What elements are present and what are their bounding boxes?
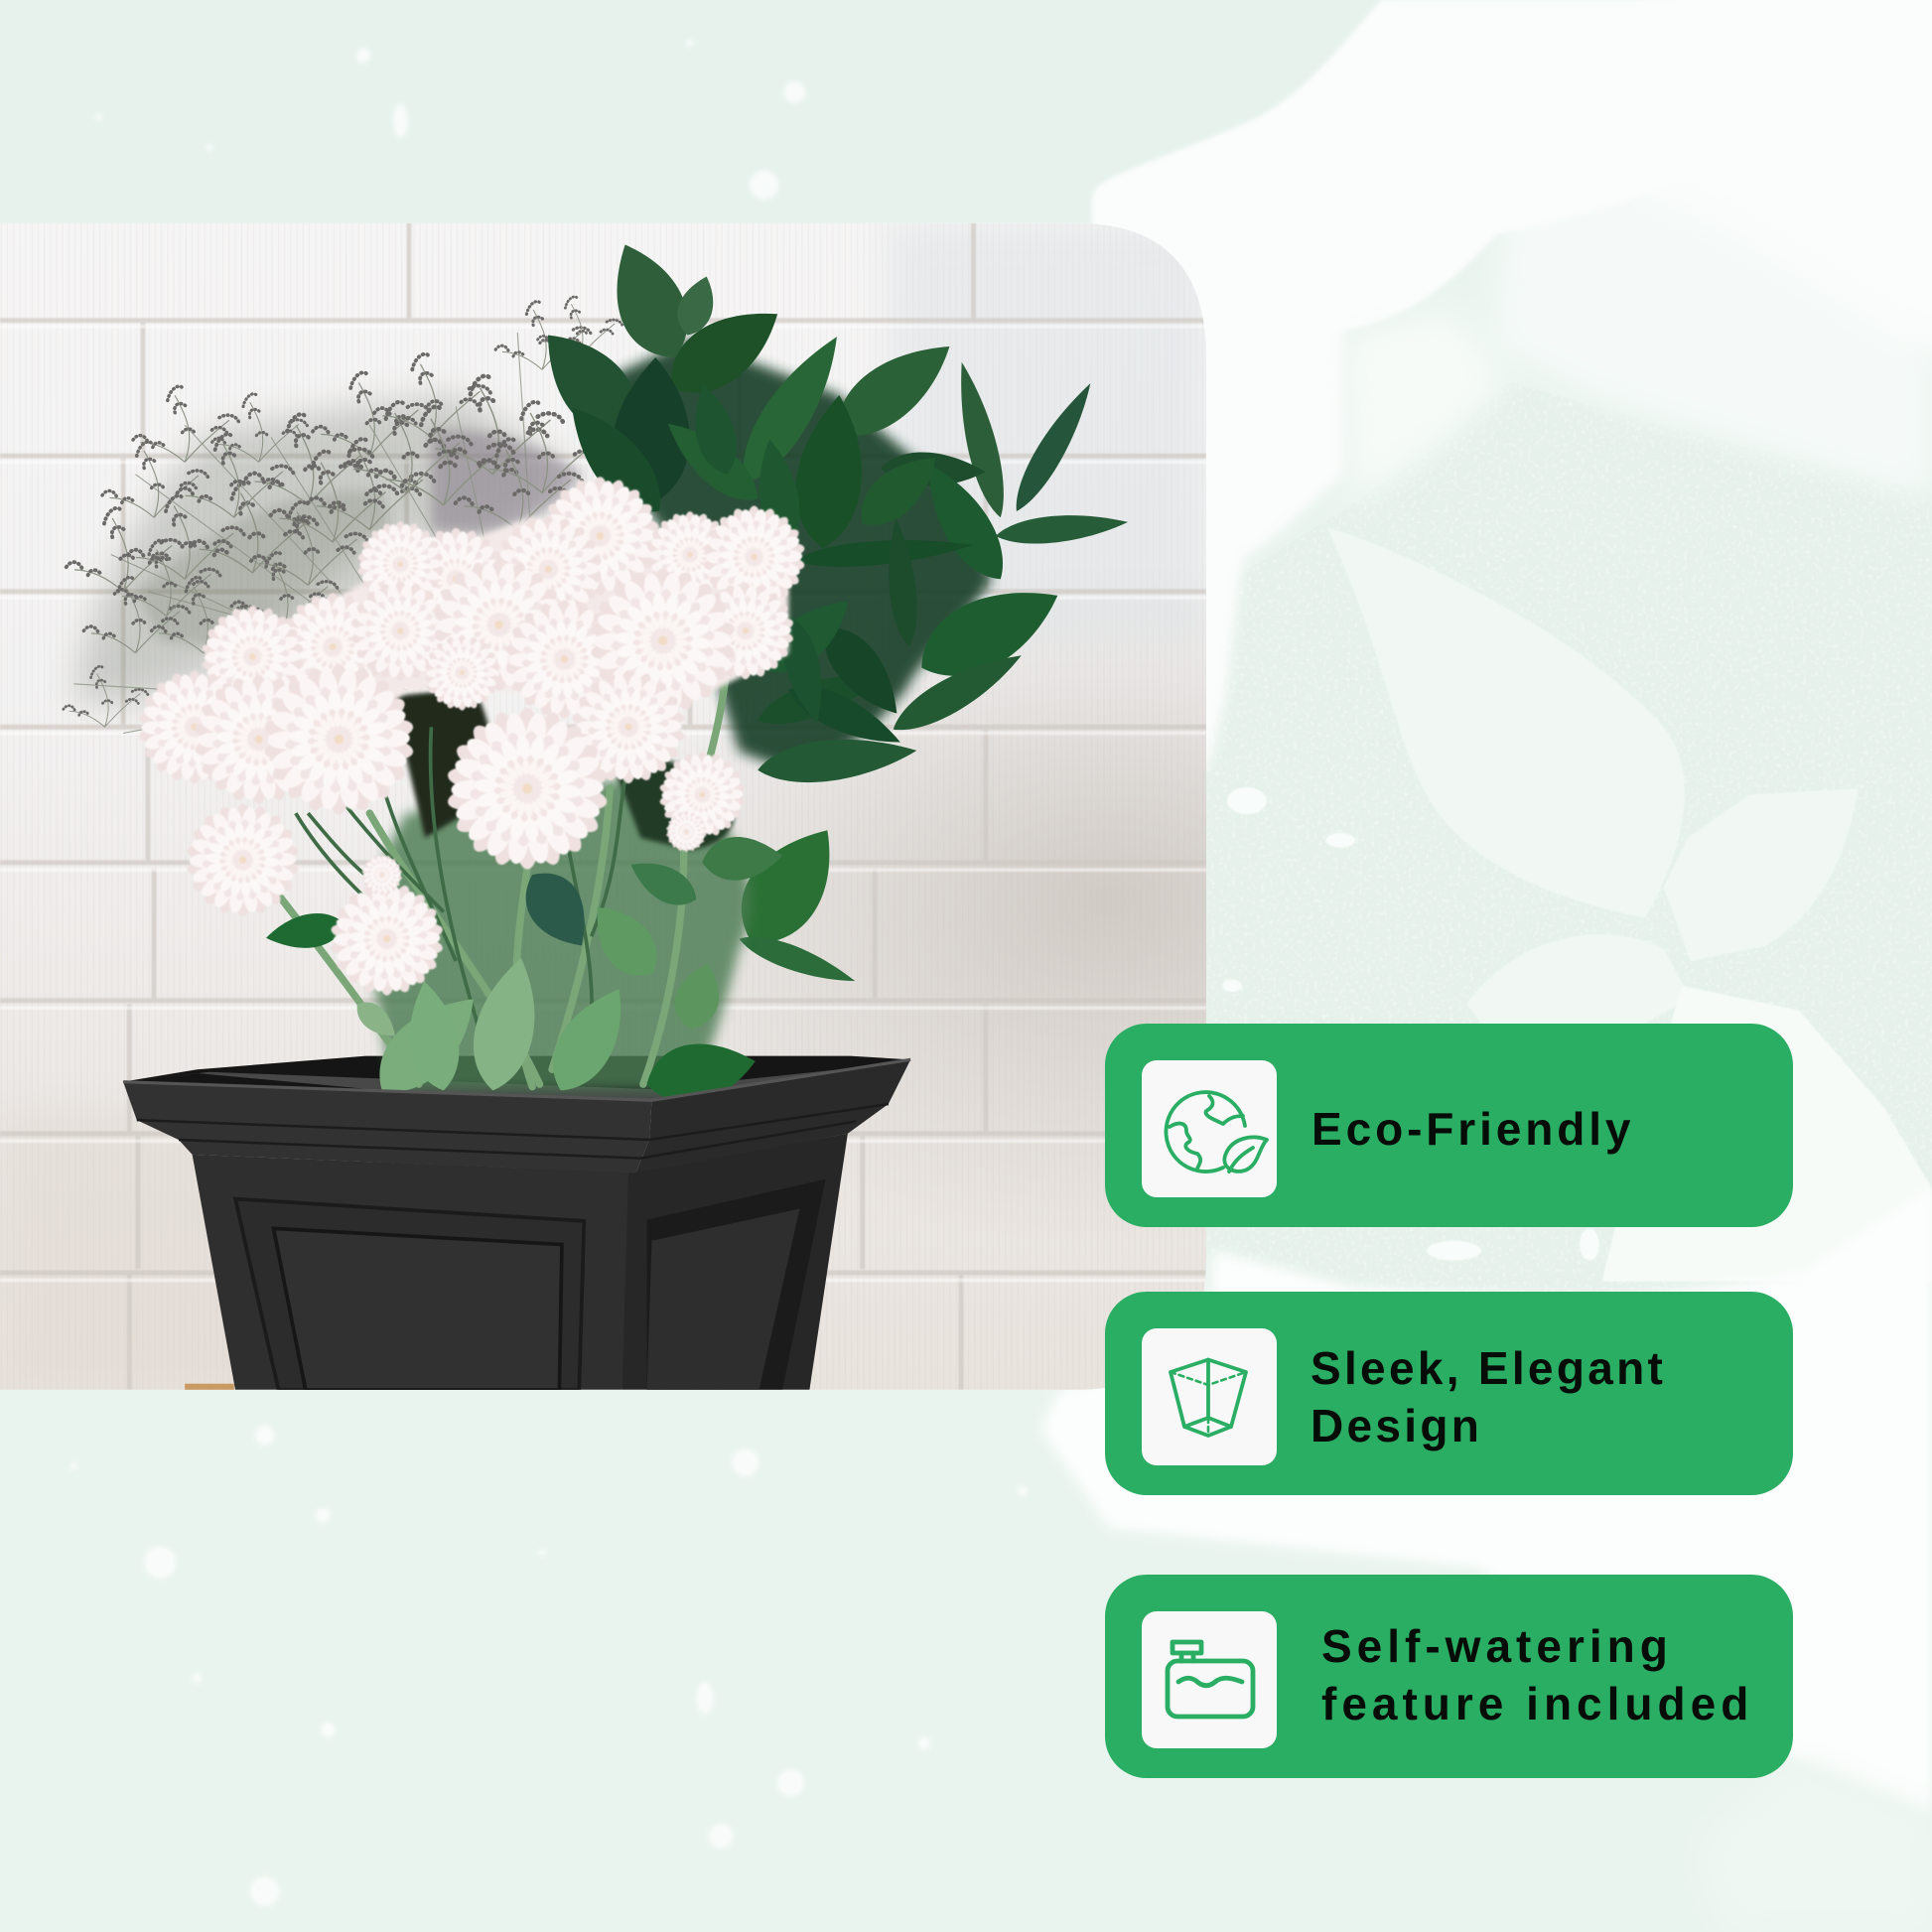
label: feature included bbox=[1321, 1678, 1753, 1729]
feature card: Sleek, Elegant Design bbox=[1105, 1292, 1793, 1495]
label: Design bbox=[1311, 1400, 1482, 1451]
icon: globe with leaf bbox=[1166, 1092, 1267, 1172]
snow speckles bbox=[70, 40, 1028, 1906]
label: Self-watering bbox=[1321, 1620, 1673, 1672]
planter interior bbox=[123, 1056, 910, 1100]
pale leaves in the background bbox=[1327, 527, 1932, 1282]
icon tile bbox=[1142, 1060, 1277, 1197]
label: Eco-Friendly bbox=[1311, 1103, 1634, 1155]
icon tile bbox=[1142, 1611, 1277, 1748]
black planter bbox=[123, 1059, 910, 1390]
label bbox=[1311, 1342, 1666, 1451]
feature card: Self-watering feature included bbox=[1105, 1575, 1793, 1778]
label: Sleek, Elegant bbox=[1311, 1342, 1666, 1394]
chrysanthemum blooms bbox=[133, 472, 809, 1000]
inner stems and mid foliage bbox=[263, 665, 784, 1111]
table edge bbox=[185, 1384, 234, 1390]
icon: water reservoir bbox=[1168, 1642, 1253, 1717]
limonium sprays bbox=[64, 297, 622, 733]
label bbox=[1321, 1620, 1753, 1729]
product photo: planter with bouquet bbox=[0, 222, 1206, 1390]
icon tile bbox=[1142, 1328, 1277, 1465]
icon: tapered planter wireframe bbox=[1171, 1360, 1246, 1436]
feature card: Eco-Friendly bbox=[1105, 1024, 1793, 1227]
brick wall bbox=[0, 222, 1206, 1390]
dark foliage bbox=[523, 232, 1129, 992]
